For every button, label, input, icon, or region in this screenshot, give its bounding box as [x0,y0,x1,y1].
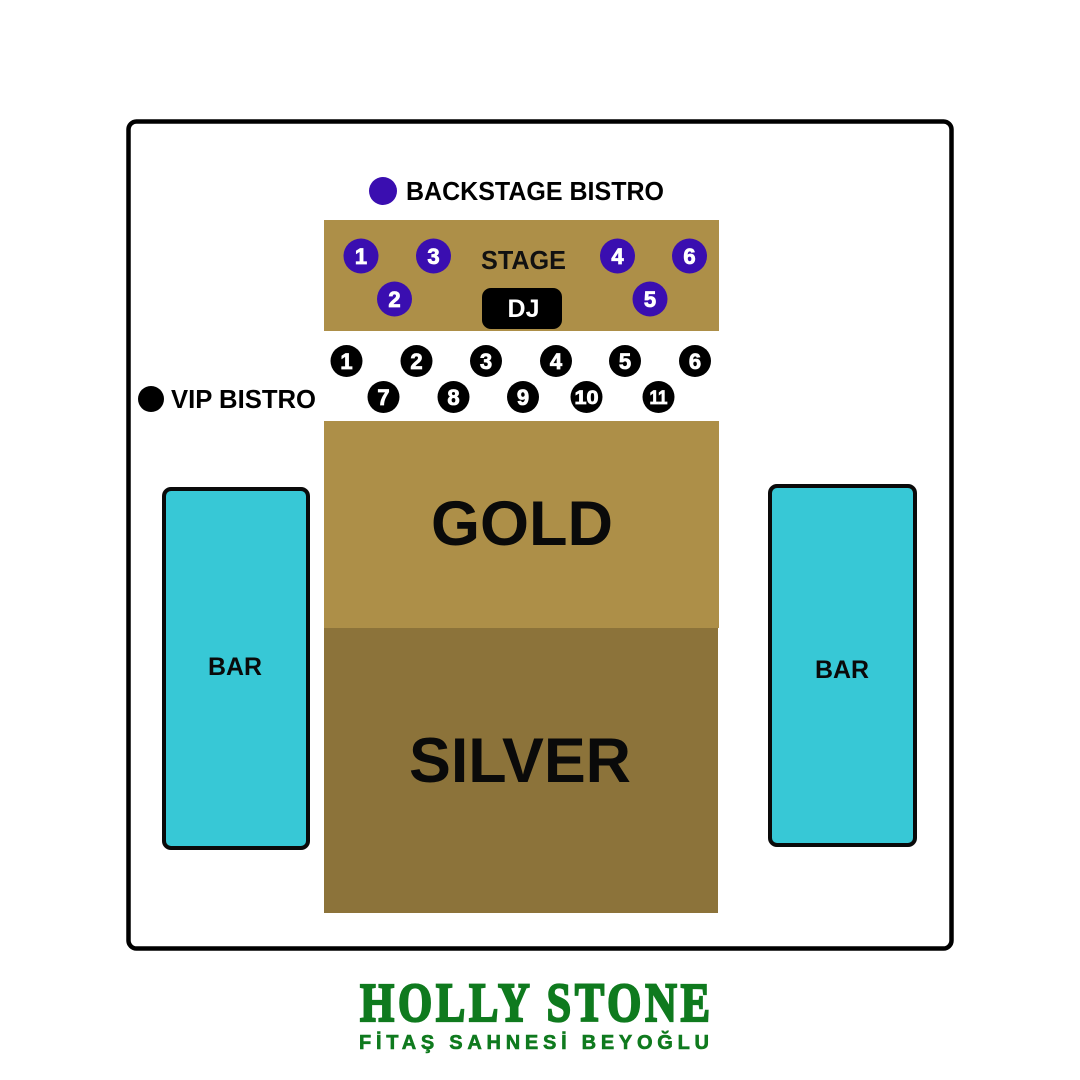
venue frame [128,122,952,948]
left bar [164,489,308,848]
VIP table 3: 3 [480,349,492,374]
VIP table 6: 6 [689,349,701,374]
backstage bistro table 1: 1 [355,244,367,269]
right bar [770,486,915,845]
gold section [324,421,719,628]
backstage bistro table 4 [600,238,635,274]
VIP table 9: 9 [517,385,529,410]
VIP table 3 [470,345,502,377]
left bar: BAR [208,653,262,681]
logo: Holly Stone: HOLLY STONE [360,972,710,1033]
silver section: SILVER [409,726,631,796]
backstage bistro table 4: 4 [611,244,624,269]
VIP table 1 [330,345,362,377]
VIP table 10: 10 [574,388,598,409]
backstage bistro table 6: 6 [683,244,696,269]
backstage bistro table 5: 5 [644,287,656,312]
VIP table 7 [368,381,400,413]
gold section: GOLD [431,489,613,559]
VIP table 11 [642,381,674,413]
silver section [324,628,718,913]
VIP table 8 [438,381,470,413]
VIP table 9 [507,381,539,413]
backstage bistro table 6 [672,238,707,274]
DJ booth [482,288,562,329]
VIP table 5 [609,345,641,377]
VIP table 4 [540,345,572,377]
VIP table 10 [570,381,602,413]
stage panel [324,220,719,331]
backstage bistro table 5 [632,282,668,316]
right bar: BAR [815,656,869,684]
VIP table 6 [679,345,711,377]
VIP bistro tables [330,345,711,413]
VIP table 8: 8 [447,385,460,410]
VIP table 1: 1 [340,349,353,374]
legend: VIP bistro: VIP BISTRO [171,384,316,414]
backstage bistro table 2 [377,282,412,316]
stage label: STAGE [481,245,566,275]
VIP table 2: 2 [410,349,423,374]
backstage bistro table 2: 2 [388,287,401,312]
DJ booth: DJ [508,295,539,323]
backstage bistro table 3: 3 [427,244,440,269]
VIP table 7: 7 [377,385,390,410]
logo subtitle: FİTAŞ SAHNESİ BEYOĞLU [359,1030,709,1054]
legend: backstage bistro: BACKSTAGE BISTRO [406,176,664,206]
backstage bistro table 1 [344,238,378,274]
VIP table 5: 5 [619,349,631,374]
VIP table 4: 4 [550,349,563,374]
VIP table 11: 11 [650,388,668,409]
VIP table 2 [400,345,432,377]
backstage bistro table 3 [416,238,451,274]
